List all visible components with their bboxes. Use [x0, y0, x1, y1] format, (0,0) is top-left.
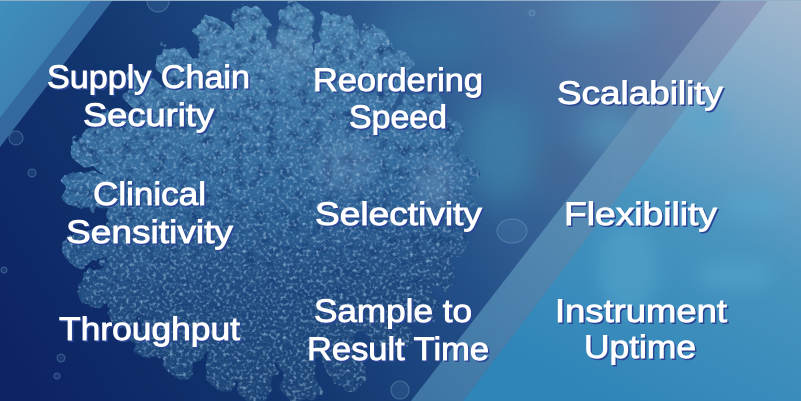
label: Scalability: Scalability: [557, 75, 724, 111]
label: Selectivity: Selectivity: [315, 196, 483, 232]
label: Reordering Speed: Speed: [349, 99, 447, 135]
label: Supply Chain Security: Supply Chain: [47, 59, 250, 95]
soft blurred shapes in right panel: [598, 104, 785, 315]
top-left corner panel: [0, 0, 92, 118]
label: Clinical Sensitivity: [66, 176, 234, 250]
label: Supply Chain Security: [47, 59, 250, 133]
label: Sample to Result Time: [307, 293, 489, 367]
label: Sample to Result Time: Result Time: [307, 331, 489, 367]
right panel: [463, 0, 801, 401]
bubbles: [1, 0, 621, 399]
label: Instrument Uptime: Uptime: [584, 329, 696, 365]
blurred background shapes: [375, 0, 645, 205]
label: Throughput: Throughput: [59, 311, 240, 347]
top-left corner band: [0, 0, 113, 147]
top edge highlight: [0, 0, 801, 1]
labels: [47, 59, 727, 367]
label: Sample to Result Time: Sample to: [314, 293, 472, 329]
light highlights on virus: [262, 34, 457, 213]
label: Clinical Sensitivity: Sensitivity: [66, 214, 234, 250]
virus particle: [78, 22, 458, 385]
label: Reordering Speed: Reordering: [313, 62, 483, 98]
label: Clinical Sensitivity: Clinical: [93, 176, 206, 212]
label: Reordering Speed: [313, 62, 483, 135]
label: Instrument Uptime: [555, 293, 727, 365]
diagonal translucent band: [411, 0, 768, 401]
label: Flexibility: Flexibility: [564, 196, 718, 232]
label: Instrument Uptime: Instrument: [555, 293, 727, 329]
label: Supply Chain Security: Security: [83, 97, 215, 133]
